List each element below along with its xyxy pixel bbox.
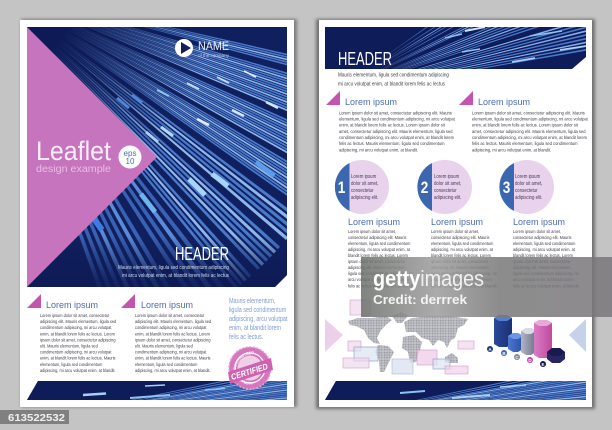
- text block column 2: consectetur adipiscing elit. Mauris: [431, 235, 489, 240]
- text block left 2: [135, 313, 212, 373]
- watermark: gettyimages: Credit: derrrek: [373, 292, 468, 307]
- text block column 3: elementum, ligula sed condimentum: [513, 241, 576, 246]
- text block right 2: adipiscing, mi arcu volutpat enim, at blandit.: [472, 147, 551, 153]
- blue side text: ligula sed condimentum: [229, 306, 286, 314]
- text block left 1: Lorem ipsum dolor sit amet, consectetur: [40, 313, 110, 318]
- cover header: HEADER: [175, 244, 229, 264]
- text block right 1: elementum, ligula sed condimentum adipiscing, mi arcu volutpat: [339, 116, 456, 122]
- icon: triangle right 1: [326, 91, 340, 105]
- numbered circle 2: 2: [421, 179, 428, 197]
- chart legend dots: [487, 346, 546, 367]
- blue side text: felis ac lectus.: [229, 333, 263, 341]
- cover artwork with light streaks: [27, 27, 287, 287]
- panel: left leaflet page: [20, 20, 294, 407]
- text block left 2: adipiscing elit. Mauris elementum, ligula sed: [135, 319, 212, 324]
- chart legend dots: E: [541, 362, 545, 367]
- map label boxes: [343, 300, 474, 374]
- icon: triangle right 2: [459, 91, 473, 105]
- stamp: certified: [228, 346, 273, 390]
- world map: [343, 300, 474, 374]
- text block right 1: enim, at blandit lorem felis ac lectus. Lorem ipsum dolor sit: [339, 122, 446, 128]
- numbered circle 1: [335, 160, 389, 214]
- chart legend dots: C: [515, 355, 519, 360]
- text block left 1: ipsum dolor sit amet, consectetur adipiscing: [40, 337, 116, 343]
- page intro text: [338, 72, 449, 88]
- page header: HEADER: [338, 49, 392, 69]
- right page shadow: [316, 19, 595, 409]
- bar D: [534, 320, 552, 358]
- stamp: certified: CERTIFIED: [230, 361, 269, 382]
- icon: play logo: [175, 39, 193, 57]
- text block right 2: [472, 110, 589, 153]
- text block left 2: condimentum adipiscing, mi arcu volutpat: [135, 325, 207, 330]
- numbered circle 2: Lorem ipsum: [434, 174, 459, 180]
- text block column 2: adipiscing elit. Mauris elementum,: [431, 265, 490, 270]
- text block column 2: felis ac lectus volutpat enim, at blandit.: [431, 283, 498, 289]
- text block left 2: elit. Mauris elementum, ligula sed: [135, 343, 193, 349]
- bar E: [547, 348, 565, 363]
- streak dimming: [27, 27, 202, 145]
- text block right 1: condimentum adipiscing, mi arcu volutpat enim, at blandit lorem: [339, 135, 454, 140]
- blue side text: adipiscing, arcu volutpat: [229, 315, 288, 323]
- text block column 1: elementum, ligula sed condimentum: [348, 241, 411, 246]
- chart legend dots: B: [502, 351, 506, 356]
- chart legend dots: D: [528, 358, 532, 363]
- pink cover triangle: [27, 27, 157, 287]
- blue side text: Mauris elementum,: [229, 297, 276, 305]
- text block left 1: [40, 313, 117, 373]
- left page shadow: [21, 19, 297, 407]
- text block right 1: adipiscing, mi arcu volutpat enim, at blandit.: [339, 147, 418, 153]
- text block left 1: enim, at blandit lorem felis ac lectus. Mauris: [40, 355, 116, 361]
- text block column 2: Lorem ipsum dolor sit amet,: [431, 229, 479, 234]
- cover subtitle: mi arcu volutpat enim, at blandit lorem felis ac lectus: [122, 273, 229, 279]
- cover subtitle: Mauris elementum, ligula sed condimentum adipiscing: [118, 265, 229, 271]
- text block column 3: [513, 229, 580, 289]
- text block column 2: ligula sed condimentum adipiscing, mi: [431, 271, 497, 276]
- text block column 3: ipsum dolor sit amet, consectetur: [513, 259, 571, 264]
- badge: eps 10: [118, 146, 142, 168]
- top header band: [325, 27, 586, 69]
- text block left 2: Lorem ipsum dolor sit amet, consectetur: [135, 313, 205, 318]
- heading: column 1: Lorem ipsum: [348, 217, 400, 228]
- title: Leaflet design example: design example: [36, 164, 111, 175]
- text block column 1: Lorem ipsum dolor sit amet,: [348, 229, 396, 234]
- bottom band right: [325, 381, 586, 400]
- logo name: of the company: [198, 53, 230, 58]
- text block left 1: elementum, ligula sed condimentum: [40, 362, 103, 367]
- stamp: certified: QUALITY: [239, 380, 253, 385]
- arrow: right blue: [569, 319, 586, 352]
- text block right 1: [339, 110, 456, 153]
- numbered circle 1: consectetur: [351, 188, 374, 194]
- text block column 1: adipiscing, mi arcu volutpat enim, at: [348, 247, 411, 252]
- text block right 2: condimentum adipiscing, mi arcu volutpat enim, at blandit lorem: [472, 135, 587, 140]
- text block column 2: elementum, ligula sed condimentum: [431, 241, 494, 246]
- heading: Lorem ipsum left 1: Lorem ipsum: [46, 300, 98, 311]
- title: Leaflet design example: Leaflet: [36, 136, 111, 166]
- logo name: NAME: [198, 39, 229, 53]
- numbered circle 1: adipiscing elit.: [351, 195, 378, 201]
- logo name: [198, 39, 230, 58]
- bottom band left: [27, 381, 287, 400]
- text block right 1: felis ac lectus. Mauris elementum, ligula sed condimentum: [339, 141, 445, 146]
- numbered circle 3: adipiscing elit.: [515, 195, 542, 201]
- text block left 1: condimentum adipiscing, mi arcu volutpat: [40, 349, 112, 355]
- 3D bar chart: [487, 315, 565, 367]
- text block column 3: adipiscing, mi arcu volutpat enim, at: [513, 247, 576, 252]
- text block left 2: elementum, ligula sed condimentum: [135, 362, 198, 367]
- text block left 2: enim, at blandit lorem felis ac lectus. Mauris: [135, 355, 211, 361]
- text block right 2: felis ac lectus. Mauris elementum, ligula sed condimentum: [472, 141, 578, 146]
- watermark: gettyimages: [361, 257, 612, 317]
- stock id label: 613522532: [8, 412, 65, 424]
- watermark: gettyimages: gettyimages: [373, 266, 484, 291]
- text block left 1: condimentum adipiscing, mi arcu volutpat: [40, 325, 112, 330]
- text block column 1: ligula sed condimentum adipiscing, mi: [348, 271, 414, 276]
- numbered circle 2: consectetur: [434, 188, 457, 194]
- text block column 3: Lorem ipsum dolor sit amet,: [513, 229, 561, 234]
- numbered circle 3: consectetur: [515, 188, 538, 194]
- page intro text: mi arcu volutpat enim, at blandit lorem felis ac lectus: [338, 82, 445, 88]
- heading: Lorem ipsum right 1: Lorem ipsum: [345, 97, 397, 108]
- text block column 1: ipsum dolor sit amet, consectetur: [348, 259, 406, 264]
- chart legend dots: A: [488, 347, 492, 352]
- text block column 1: [348, 229, 415, 289]
- text block left 1: adipiscing, mi arcu volutpat enim, at blandit.: [40, 368, 116, 373]
- badge: eps 10: 10: [126, 157, 135, 166]
- text block column 1: adipiscing elit. Mauris elementum,: [348, 265, 407, 270]
- numbered circle 3: [499, 160, 554, 214]
- text block left 1: adipiscing elit. Mauris elementum, ligula sed: [40, 319, 117, 324]
- numbered circle 3: dolor sit amet,: [515, 181, 542, 187]
- numbered circle 3: 3: [503, 179, 510, 197]
- text block right 2: enim, at blandit lorem felis ac lectus. Lorem ipsum dolor sit: [472, 122, 579, 128]
- text block right 1: Lorem ipsum dolor sit amet, consectetur adipiscing elit. Mauris: [339, 110, 453, 116]
- arrow: left pink: [325, 319, 343, 352]
- icon: triangle left 2: [121, 294, 135, 308]
- bar C: [521, 328, 536, 355]
- text block right 2: amet, consectetur adipiscing elit. Mauris elementum, ligula sed: [472, 129, 586, 134]
- bright streak highlights: [92, 71, 278, 230]
- page intro text: Mauris elementum, ligula sed condimentum adipiscing: [338, 72, 449, 78]
- stock id label: [0, 410, 69, 424]
- stamp: certified: GUARANTEED: [233, 352, 254, 370]
- numbered circle 2: dolor sit amet,: [434, 181, 461, 187]
- text block column 2: arcu volutpat enim, at blandit lorem: [431, 277, 492, 282]
- text block column 1: consectetur adipiscing elit. Mauris: [348, 235, 406, 240]
- text block right 1: amet, consectetur adipiscing elit. Mauris elementum, ligula sed: [339, 129, 453, 134]
- blue side text: [229, 297, 288, 341]
- text block left 2: enim, at blandit lorem felis ac lectus. Lorem: [135, 331, 210, 337]
- panel: right leaflet page: [319, 20, 592, 407]
- text block right 2: Lorem ipsum dolor sit amet, consectetur adipiscing elit. Mauris: [472, 110, 586, 116]
- blue side text: enim, at blandit lorem: [229, 324, 281, 332]
- text block column 1: arcu volutpat enim, at blandit lorem: [348, 277, 409, 282]
- heading: Lorem ipsum left 2: Lorem ipsum: [141, 300, 193, 311]
- bar B: [508, 333, 523, 352]
- cover subtitle: [118, 265, 229, 279]
- text block left 2: adipiscing, mi arcu volutpat enim, at blandit.: [135, 368, 211, 373]
- heading: column 3: Lorem ipsum: [513, 217, 565, 228]
- text block column 2: blandit lorem felis ac lectus. Lorem: [431, 253, 491, 258]
- text block left 2: condimentum adipiscing, mi arcu volutpat: [135, 349, 207, 355]
- text block column 2: adipiscing, mi arcu volutpat enim, at: [431, 247, 494, 252]
- icon: triangle left 1: [27, 294, 41, 308]
- numbered circle 2: adipiscing elit.: [434, 195, 461, 201]
- text block column 3: arcu volutpat enim, at blandit lorem: [513, 277, 574, 282]
- text block right 2: elementum, ligula sed condimentum adipiscing, mi arcu volutpat: [472, 116, 589, 122]
- text block left 1: elit. Mauris elementum, ligula sed: [40, 343, 98, 349]
- text block column 3: adipiscing elit. Mauris elementum,: [513, 265, 572, 270]
- numbered circle 2: [417, 160, 472, 214]
- numbered circle 3: Lorem ipsum: [515, 174, 540, 180]
- numbered circle 1: 1: [338, 179, 346, 197]
- badge: eps 10: eps: [124, 149, 136, 158]
- heading: Lorem ipsum right 2: Lorem ipsum: [478, 97, 530, 108]
- text block left 2: ipsum dolor sit amet, consectetur adipiscing: [135, 337, 211, 343]
- text block column 1: blandit lorem felis ac lectus. Lorem: [348, 253, 408, 258]
- text block column 1: felis ac lectus volutpat enim, at blandit.: [348, 283, 415, 289]
- text block column 2: ipsum dolor sit amet, consectetur: [431, 259, 489, 264]
- text block column 3: felis ac lectus volutpat enim, at blandit.: [513, 283, 580, 289]
- bar A: [494, 315, 512, 347]
- text block left 1: enim, at blandit lorem felis ac lectus. Lorem: [40, 331, 115, 337]
- text block column 2: [431, 229, 498, 289]
- text block column 3: consectetur adipiscing elit. Mauris: [513, 235, 571, 240]
- text block column 3: ligula sed condimentum adipiscing, mi: [513, 271, 579, 276]
- text block column 3: blandit lorem felis ac lectus. Lorem: [513, 253, 573, 258]
- numbered circle 1: dolor sit amet,: [351, 181, 378, 187]
- heading: column 2: Lorem ipsum: [431, 217, 483, 228]
- numbered circle 1: Lorem ipsum: [351, 174, 376, 180]
